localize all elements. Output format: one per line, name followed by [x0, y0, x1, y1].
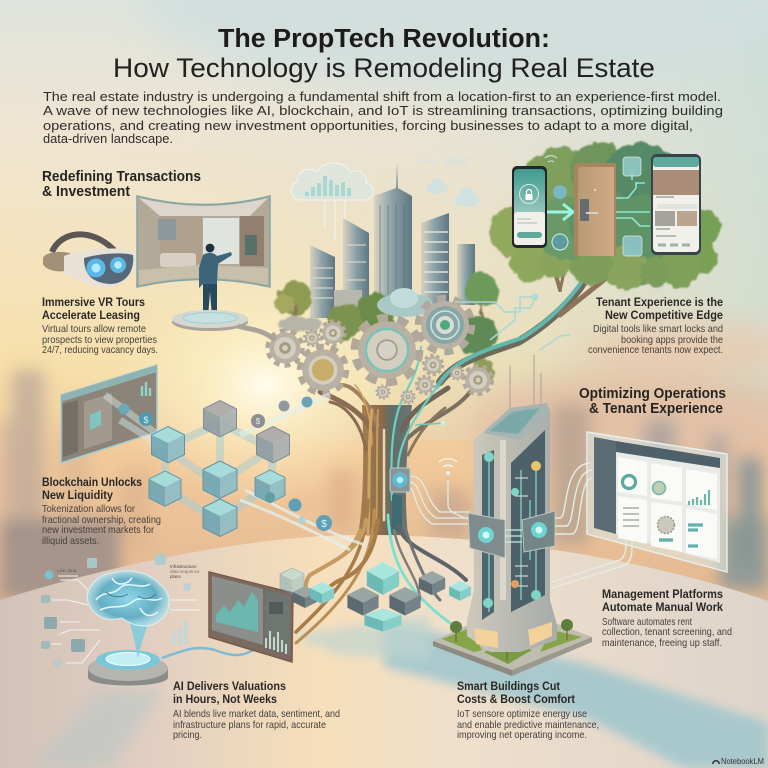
text: Blockchain: Tokenization allows for [42, 503, 135, 515]
intro paragraph: The real estate industry is undergoing a fundamental shift from a location-first to an experience-first model. [43, 89, 721, 104]
title: The PropTech Revolution: [218, 25, 550, 53]
smart building tower [433, 403, 632, 676]
panel: valuation tablet [209, 572, 293, 662]
small clouds [418, 155, 480, 207]
icon: data cloud with buildings skyline [291, 155, 480, 322]
text: VR tours: 24/7, reducing vacancy days. [42, 344, 158, 356]
tower frame [467, 403, 557, 652]
connector lines [52, 576, 200, 663]
Live data label: Live data [57, 568, 77, 574]
text: Blockchain: illiquid assets. [42, 535, 99, 547]
panel: curved VR room screen [137, 196, 270, 287]
smart door [574, 163, 616, 256]
background: blurred city skyline [0, 370, 768, 600]
text: AI valuations: pricing. [173, 729, 202, 741]
text: Management platforms: maintenance, freeing up staff. [602, 637, 722, 649]
text: Smart buildings: improving net operating income. [457, 729, 587, 741]
intro paragraph: data-driven landscape. [43, 131, 173, 146]
text: VR tours [42, 295, 158, 356]
title: How Technology is Remodeling Real Estate [113, 53, 655, 83]
text: AI valuations: AI Delivers Valuations [173, 679, 286, 693]
text: Tenant experience: booking apps provide the [621, 334, 723, 346]
text: Blockchain: New Liquidity [42, 488, 113, 502]
text: Smart buildings: Costs & Boost Comfort [457, 692, 575, 706]
skyscrapers [310, 163, 475, 322]
booking phone [651, 154, 701, 255]
token coins: $ [143, 415, 149, 425]
text: Optimizing Operations heading: Optimizing Operations [579, 386, 726, 402]
hologram cloud [291, 163, 373, 240]
left and right dark screens [482, 450, 494, 620]
intro paragraph: operations, and creating new investment opportunities, forcing businesses to adapt to a more digital, [43, 118, 693, 133]
base [88, 650, 168, 686]
input icons [41, 554, 191, 668]
Infrastructure label: Infrastructure [170, 564, 197, 569]
person in VR [199, 244, 232, 317]
text: VR tours: Accelerate Leasing [42, 308, 140, 322]
entrance [474, 622, 552, 648]
text: Optimizing Operations heading: & Tenant Experience [589, 401, 723, 417]
tree: trunk and root cables [296, 245, 650, 643]
icon: VR headset [43, 234, 136, 287]
Infrastructure label: data sequence [170, 569, 200, 574]
lock phone [512, 166, 547, 248]
floating icons [545, 156, 642, 256]
text: AI valuations: infrastructure plans for rapid, accurate [173, 719, 326, 731]
text: Tenant experience: convenience tenants now expect. [588, 344, 723, 356]
panel: tokenization dashboard [61, 365, 157, 463]
tenant tree foliage [490, 142, 721, 290]
text: Tenant experience [588, 295, 723, 356]
upper branches [320, 385, 470, 455]
brain [87, 571, 169, 626]
text: Management platforms: Management Platforms [602, 587, 723, 601]
text: Blockchain: Blockchain Unlocks [42, 475, 142, 489]
text: AI valuations: AI blends live market data, sentiment, and [173, 708, 340, 720]
token coins [118, 396, 332, 531]
gears cluster [268, 298, 492, 404]
Infrastructure label [170, 564, 200, 579]
hologram cloud on crown [377, 288, 433, 317]
text: AI valuations [173, 679, 340, 741]
tenant branch [437, 245, 650, 387]
title [113, 25, 655, 83]
root cables [296, 500, 466, 643]
text: Tenant experience: New Competitive Edge [605, 308, 723, 322]
text: Tenant experience: Tenant Experience is the [596, 295, 723, 309]
text: Redefining Transactions heading: Redefining Transactions [42, 169, 201, 185]
token coins: $ [256, 417, 261, 426]
Infrastructure label: plans [170, 574, 182, 579]
text: Management platforms [602, 587, 732, 649]
VR platform [172, 310, 275, 340]
corner line [500, 440, 506, 600]
panel: tenant experience tree with phones and door [490, 142, 721, 290]
text: Blockchain: fractional ownership, creating [42, 514, 161, 526]
trunk sensor panel and cables [390, 355, 541, 524]
cables from door to booking phone [616, 172, 650, 226]
text: Blockchain: new investment markets for [42, 524, 154, 536]
text: Blockchain [42, 475, 161, 547]
text: Optimizing Operations heading [579, 386, 726, 417]
small circuit cables on the crown [455, 295, 570, 350]
NotebookLM watermark: NotebookLM [721, 756, 764, 766]
intro paragraph: A wave of new technologies like AI, blockchain, and IoT is streamlining transactions, optimizing building [43, 103, 723, 118]
text: Redefining Transactions heading: & Investment [42, 184, 130, 200]
data cubes at roots [280, 562, 471, 632]
text: Tenant experience: Digital tools like smart locks and [593, 323, 723, 335]
text: Smart buildings: and enable predictive maintenance, [457, 719, 599, 731]
circuit traces [489, 450, 536, 612]
table surface [0, 535, 768, 768]
building plinth [433, 606, 592, 676]
tree: main crown foliage [275, 273, 499, 386]
text: Management platforms: Automate Manual Work [602, 600, 723, 614]
sensor panel right [522, 511, 555, 552]
dashboard cards [618, 457, 717, 559]
text: VR tours: prospects to view properties [42, 334, 157, 346]
stem [128, 615, 150, 658]
arrow from phone to door [547, 204, 573, 220]
text: Management platforms: Software automates rent [602, 616, 692, 628]
text: Smart buildings [457, 679, 599, 741]
icon: holographic AI brain on base [87, 571, 256, 686]
sensor panel left [468, 513, 505, 558]
cables to dashboard [552, 463, 632, 588]
text: Redefining Transactions heading [42, 169, 201, 200]
text: VR tours: Immersive VR Tours [42, 295, 145, 309]
intro paragraph [43, 89, 723, 146]
text: Management platforms: collection, tenant screening, and [602, 626, 732, 638]
panel: AI data inputs [41, 554, 200, 668]
blockchain cube lattice [105, 395, 365, 550]
text: Smart buildings: IoT sensore optimize energy use [457, 708, 587, 720]
cable to tablet [162, 648, 256, 658]
text: AI valuations: in Hours, Not Weeks [173, 692, 277, 706]
token coins: $ [321, 519, 327, 530]
trunk cable lines [368, 347, 437, 535]
text: Smart buildings: Smart Buildings Cut [457, 679, 560, 693]
text: VR tours: Virtual tours allow remote [42, 323, 146, 335]
roof screen [483, 403, 549, 440]
panel: management dashboard [587, 432, 727, 572]
